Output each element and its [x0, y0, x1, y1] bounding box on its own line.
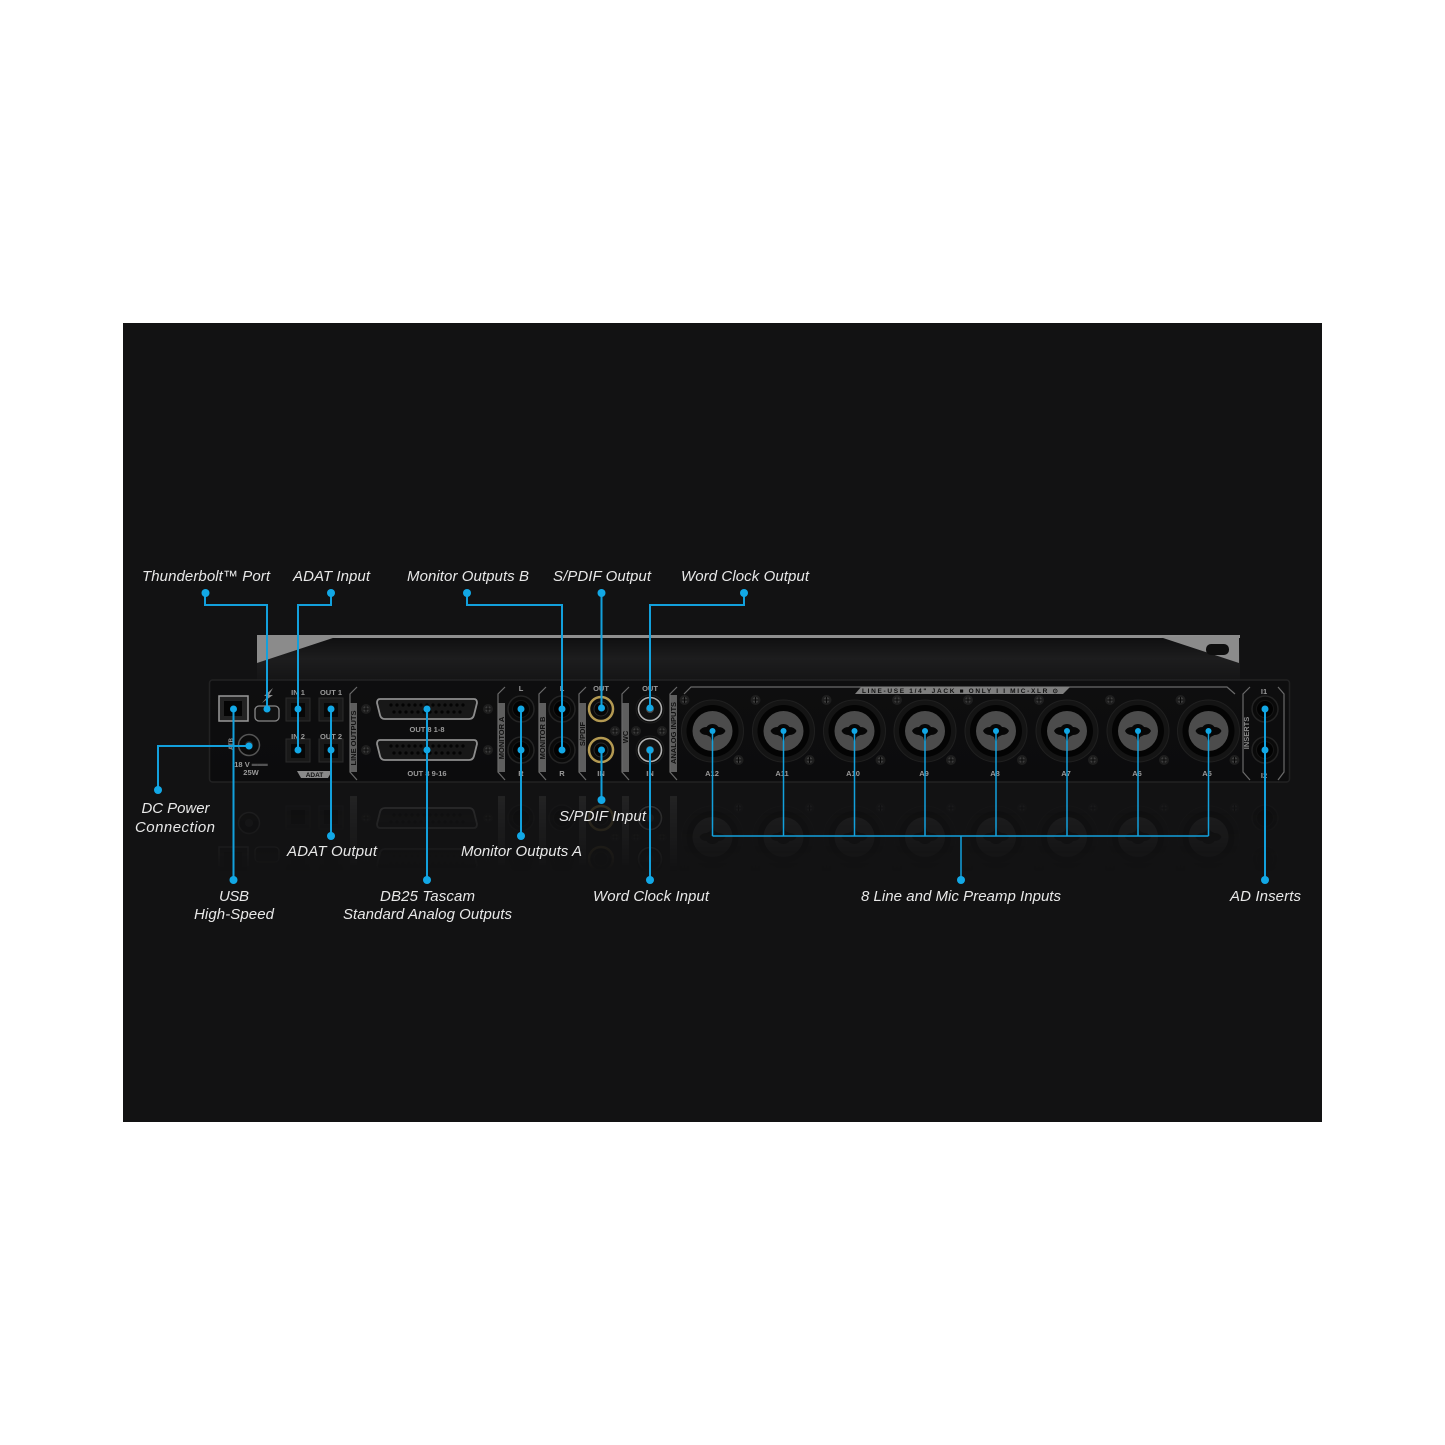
connector mini labels: A11 [775, 769, 789, 778]
callout: 8 line and mic preamp inputs [710, 728, 1212, 905]
section labels: MONITOR A [497, 716, 506, 759]
connector mini labels: A5 [1202, 769, 1212, 778]
callout: Thunderbolt port: Thunderbolt™ Port [142, 568, 271, 585]
callout: DB25 [343, 706, 512, 923]
callout: DB25: Standard Analog Outputs [343, 906, 512, 923]
section labels: LINE OUTPUTS [349, 710, 358, 766]
connector artwork [219, 695, 1278, 772]
callout: Monitor outputs B: Monitor Outputs B [407, 568, 529, 585]
callout: Monitor outputs A [461, 706, 582, 860]
connector mini labels: 25W [243, 768, 260, 777]
section brackets [350, 687, 1284, 780]
callout: USB [194, 706, 275, 923]
connector mini labels [234, 684, 1267, 780]
callout: Monitor outputs A: Monitor Outputs A [461, 843, 582, 860]
callout: USB: USB [219, 888, 249, 905]
section labels: WC [621, 730, 630, 743]
connector mini labels: 18 V ═══ [234, 760, 268, 769]
callout: AD inserts [1229, 706, 1302, 905]
callout: DC power: DC Power [142, 800, 210, 817]
connector mini labels: A9 [919, 769, 929, 778]
connector mini labels: A7 [1061, 769, 1071, 778]
connector mini labels: IN 2 [291, 732, 305, 741]
device body [210, 680, 1290, 782]
device reflection [218, 796, 1220, 854]
connector mini labels: A12 [705, 769, 719, 778]
callout: Word clock output [646, 568, 810, 712]
connector mini labels: I2 [1261, 771, 1267, 780]
connector mini labels: IN [597, 769, 605, 778]
ADAT plate [297, 771, 332, 779]
callout: DC power [135, 742, 252, 836]
callout: USB: High-Speed [194, 906, 275, 923]
connector mini labels: A10 [846, 769, 860, 778]
connector mini labels: OUT 2 [320, 732, 342, 741]
callout: ADAT input [292, 568, 371, 754]
connector mini labels: I1 [1261, 687, 1267, 696]
connector mini labels: L [519, 684, 524, 693]
input type banner: LINE-USE 1/4" JACK ■ ONLY I I MIC-XLR ⊙ [862, 688, 1059, 695]
callout: Monitor outputs B [407, 568, 566, 754]
connector mini labels: IN [646, 769, 654, 778]
section labels: MONITOR B [538, 716, 547, 759]
section labels: S/PDIF [578, 721, 587, 746]
ADAT plate: ADAT [306, 772, 323, 779]
callout: ADAT output [286, 706, 378, 860]
connector mini labels: OUT 8 9-16 [407, 769, 447, 778]
callout: Word clock input: Word Clock Input [593, 888, 710, 905]
device lid [257, 635, 1240, 682]
callout: DB25: DB25 Tascam [380, 888, 475, 905]
device: audio interface rear panel [210, 635, 1290, 782]
callout: ADAT output: ADAT Output [286, 843, 378, 860]
connector mini labels: L [560, 684, 565, 693]
connector mini labels: OUT 8 1-8 [409, 725, 445, 734]
callout: S/PDIF output [553, 568, 652, 712]
connector mini labels: R [559, 769, 565, 778]
callout: ADAT input: ADAT Input [292, 568, 371, 585]
callout: Word clock output: Word Clock Output [681, 568, 810, 585]
callout: 8 line and mic preamp inputs: 8 Line and Mic Preamp Inputs [861, 888, 1062, 905]
icon: thunderbolt [262, 688, 273, 703]
connector mini labels: OUT [642, 684, 658, 693]
connector mini labels: OUT [593, 684, 609, 693]
connector mini labels: A8 [990, 769, 1000, 778]
connector mini labels: OUT 1 [320, 688, 342, 697]
section labels: INSERTS [1242, 717, 1251, 749]
section labels: ANALOG INPUTS [669, 702, 678, 764]
callout: S/PDIF output: S/PDIF Output [553, 568, 652, 585]
callout: Thunderbolt port [142, 568, 271, 712]
panel: dark background [123, 323, 1322, 1122]
connector mini labels: R [518, 769, 524, 778]
callout: S/PDIF input [559, 746, 647, 825]
callout: DC power: Connection [135, 819, 215, 836]
callout: AD inserts: AD Inserts [1229, 888, 1302, 905]
connector mini labels: IN 1 [291, 688, 305, 697]
section labels [229, 702, 1251, 766]
callout: S/PDIF input: S/PDIF Input [559, 808, 647, 825]
section labels: ATB [229, 737, 235, 750]
connector mini labels: A6 [1132, 769, 1142, 778]
callout: Word clock input [593, 746, 710, 905]
